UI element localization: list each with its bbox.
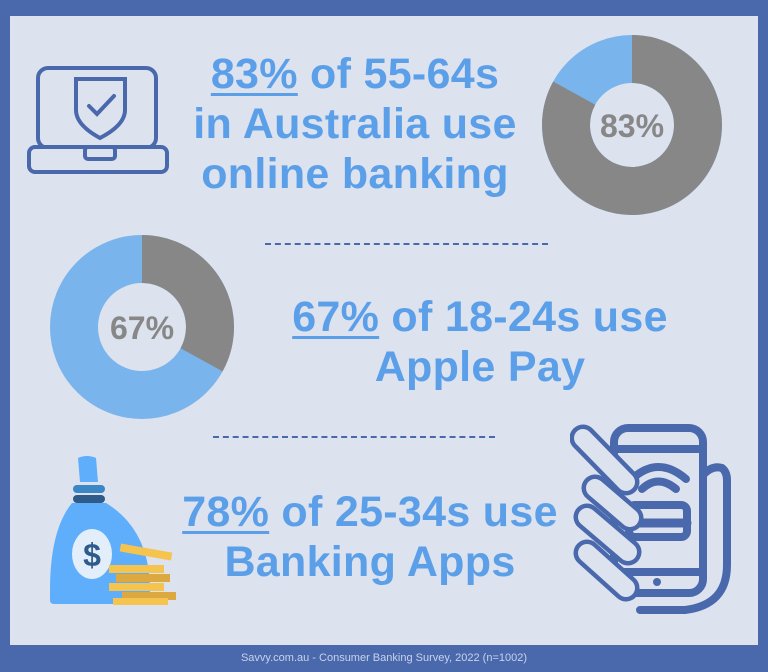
heading: 78% stat: Banking Apps (224, 538, 516, 586)
chart: donut 83%: 83% (600, 108, 664, 144)
heading: 83% stat: online banking (201, 150, 509, 198)
chart: donut 67% (50, 235, 234, 419)
chart: donut 83% (542, 35, 722, 215)
heading: 83% stat (193, 50, 517, 198)
heading: 83% stat: 83% of 55-64s (211, 50, 499, 98)
heading: 78% stat: 78% of 25-34s use (182, 488, 558, 536)
icon: money bag with coins: $ (83, 537, 101, 573)
heading: 67% stat: Apple Pay (375, 343, 585, 391)
heading: 78% stat (182, 488, 558, 586)
chart: donut 67%: 67% (110, 310, 174, 346)
heading: 67% stat (292, 293, 668, 391)
icon: laptop with shield (27, 66, 169, 174)
heading: 67% stat: 67% of 18-24s use (292, 293, 668, 341)
icon: hand with phone (570, 424, 731, 614)
footer: source: Savvy.com.au - Consumer Banking Survey, 2022 (n=1002) (241, 652, 527, 664)
heading: 83% stat: in Australia use (193, 100, 517, 148)
icon: money bag with coins (50, 456, 176, 605)
